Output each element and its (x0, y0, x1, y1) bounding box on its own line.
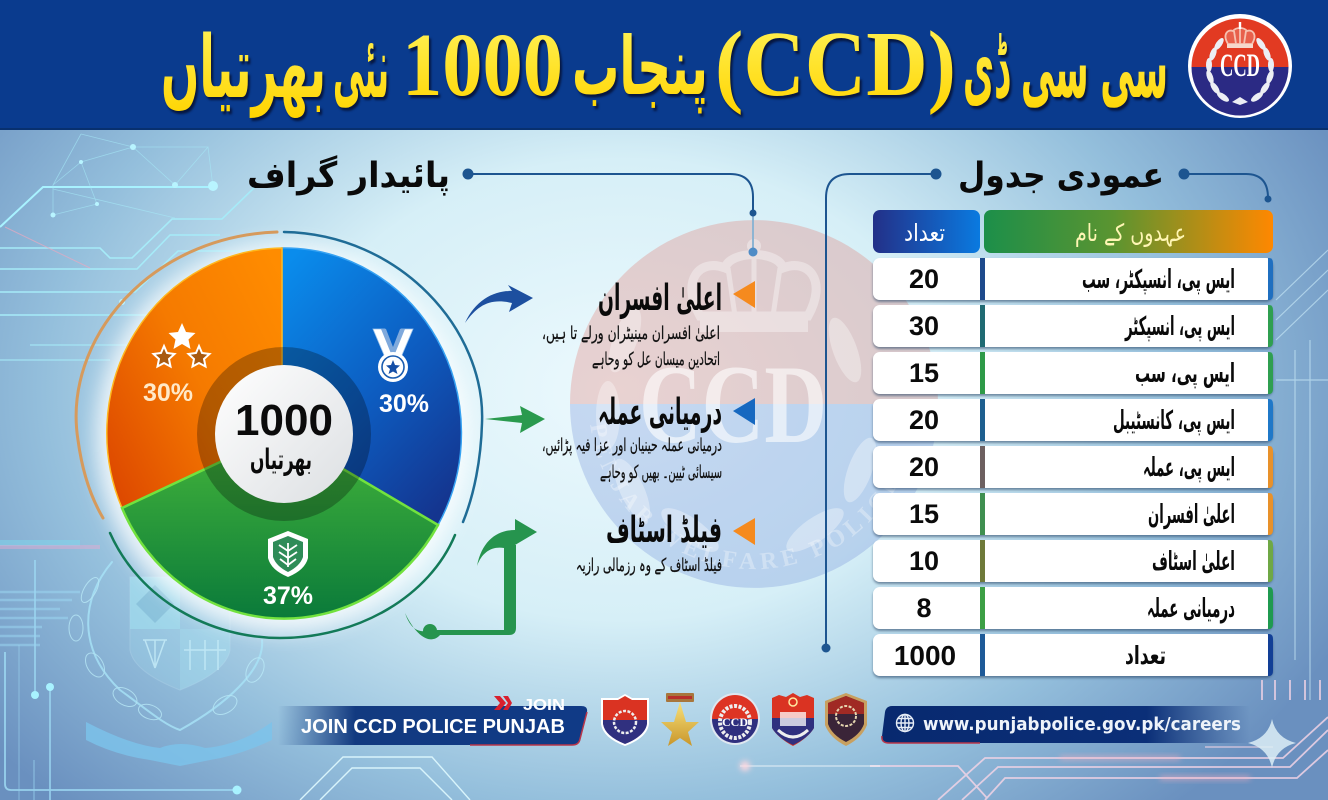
footer banner: join: JOIN CCD POLICE PUNJAB (301, 716, 565, 738)
badge: ccd circle (710, 693, 760, 745)
label: green 37%: 37% (263, 582, 313, 610)
section: field staff (576, 510, 755, 576)
donut chart (76, 232, 482, 638)
crest watermark: bottom left (69, 562, 272, 766)
row 6 (873, 493, 1273, 535)
badge: shield two (772, 693, 814, 746)
row 2 (873, 305, 1273, 347)
title: (CCD) (715, 13, 956, 116)
row 5: 20 (909, 452, 939, 482)
description: سیسائی ٹیین۔ بھیں کو وحاہے (600, 462, 722, 483)
center disc: 1000 (235, 396, 333, 445)
table header: تعداد (904, 219, 945, 247)
row 7 (873, 540, 1273, 582)
badge: shield one (601, 694, 649, 746)
connector: graph heading (462, 168, 758, 256)
row 1: 20 (909, 264, 939, 294)
row 6: اعلیٰ افسران (1148, 500, 1235, 530)
row 3: 15 (909, 358, 939, 388)
circuit dots (50, 144, 218, 305)
row 9: 1000 (894, 640, 956, 671)
row 3: ایس پی، سب (1135, 359, 1235, 389)
heading: graph: پائیدار گراف (247, 155, 450, 196)
heading: فیلڈ اسٹاف (606, 510, 722, 551)
label: blue 30%: 30% (379, 390, 429, 418)
heading: اعلیٰ افسران (598, 278, 722, 319)
outer arcs (76, 232, 482, 638)
row 8 (873, 587, 1273, 629)
description: فیلڈ اسٹاف کے وہ رزمالی رازیہ (576, 555, 722, 576)
badge: ccd circle: CCD (722, 715, 748, 729)
logo crown (1225, 22, 1255, 48)
slice: blue (282, 248, 461, 525)
row 4 (873, 399, 1273, 441)
center disc (215, 365, 353, 503)
arrow: green (485, 406, 545, 433)
description: اعلیٰ افسران مینیٹران ورلے تا ہیں،‏ (542, 323, 720, 344)
row 8: 8 (916, 593, 932, 623)
description (542, 435, 722, 483)
header band (0, 0, 1328, 130)
heading: table: عمودی جدول (958, 156, 1164, 196)
row 1 (873, 258, 1273, 300)
row 9: تعداد (1125, 641, 1166, 670)
slice: green (122, 433, 438, 619)
row 7: اعلیٰ اسٹاف (1152, 547, 1235, 577)
circuit lines: bottom left (0, 560, 237, 800)
badge: shield three (825, 693, 867, 746)
section: top officers (542, 278, 755, 370)
icon: shield (268, 531, 308, 577)
logo wreath (1205, 37, 1275, 105)
icon: globe (896, 714, 914, 732)
center disc: بھرتیاں (250, 443, 312, 476)
center ring (197, 347, 371, 521)
arrow: green elbow (405, 519, 537, 639)
footer banner: join (278, 696, 587, 745)
slice: orange (107, 248, 282, 508)
row 6: 15 (909, 499, 939, 529)
table (873, 210, 1273, 676)
watermark wreath (596, 304, 883, 559)
marker (733, 398, 755, 425)
footer banner: website (882, 706, 1250, 743)
footer banner: website: www.punjabpolice.gov.pk/careers (923, 714, 1241, 735)
logo: CCD badge (1188, 14, 1292, 118)
section: mid staff (542, 392, 755, 483)
title (161, 13, 1168, 118)
label: orange 30%: 30% (143, 379, 193, 407)
arrow: blue (465, 285, 533, 323)
logo letters: CCD (1220, 48, 1260, 84)
description: اتحادین میسان عل کو وحاہے (592, 349, 720, 370)
description (542, 323, 720, 370)
connector: table heading (822, 168, 1272, 652)
row 8: درمیانی عملہ (1147, 594, 1235, 624)
chevrons (494, 696, 512, 710)
row 5 (873, 446, 1273, 488)
row 5: ایس پی، عملہ (1143, 453, 1235, 483)
title: نئی (333, 18, 389, 118)
circuit lines: top left (0, 134, 280, 360)
marker (733, 281, 755, 308)
watermark letters: CCD (639, 343, 827, 467)
circuit lines: right of table (1276, 250, 1328, 700)
icon: sparkle (1248, 719, 1296, 768)
row 2: 30 (909, 311, 939, 341)
description: درمیانی عملہ حینیان اور عزا فیہ پڑائیں،‏ (542, 435, 722, 456)
icon: stars (154, 323, 210, 366)
table header (873, 210, 1273, 253)
table header: عہدوں کے نام (1075, 219, 1186, 247)
heading: درمیانی عملہ (598, 392, 722, 433)
watermark: CCD emblem (570, 220, 938, 588)
row 3 (873, 352, 1273, 394)
footer banner: join: JOIN (523, 697, 565, 714)
icon: medal (373, 329, 413, 382)
title: بھرتیاں (161, 18, 326, 118)
marker (733, 518, 755, 545)
title: پنجاب (572, 20, 708, 114)
title: 1000 (402, 16, 563, 115)
watermark crown (692, 239, 816, 332)
row 9 (873, 634, 1273, 676)
row 4: 20 (909, 405, 939, 435)
badge: gold star (661, 693, 699, 746)
row 7: 10 (909, 546, 939, 576)
circuit lines: bottom right (870, 680, 1328, 800)
watermark arc text: PENJAB WELFARE POLICE (590, 422, 896, 570)
